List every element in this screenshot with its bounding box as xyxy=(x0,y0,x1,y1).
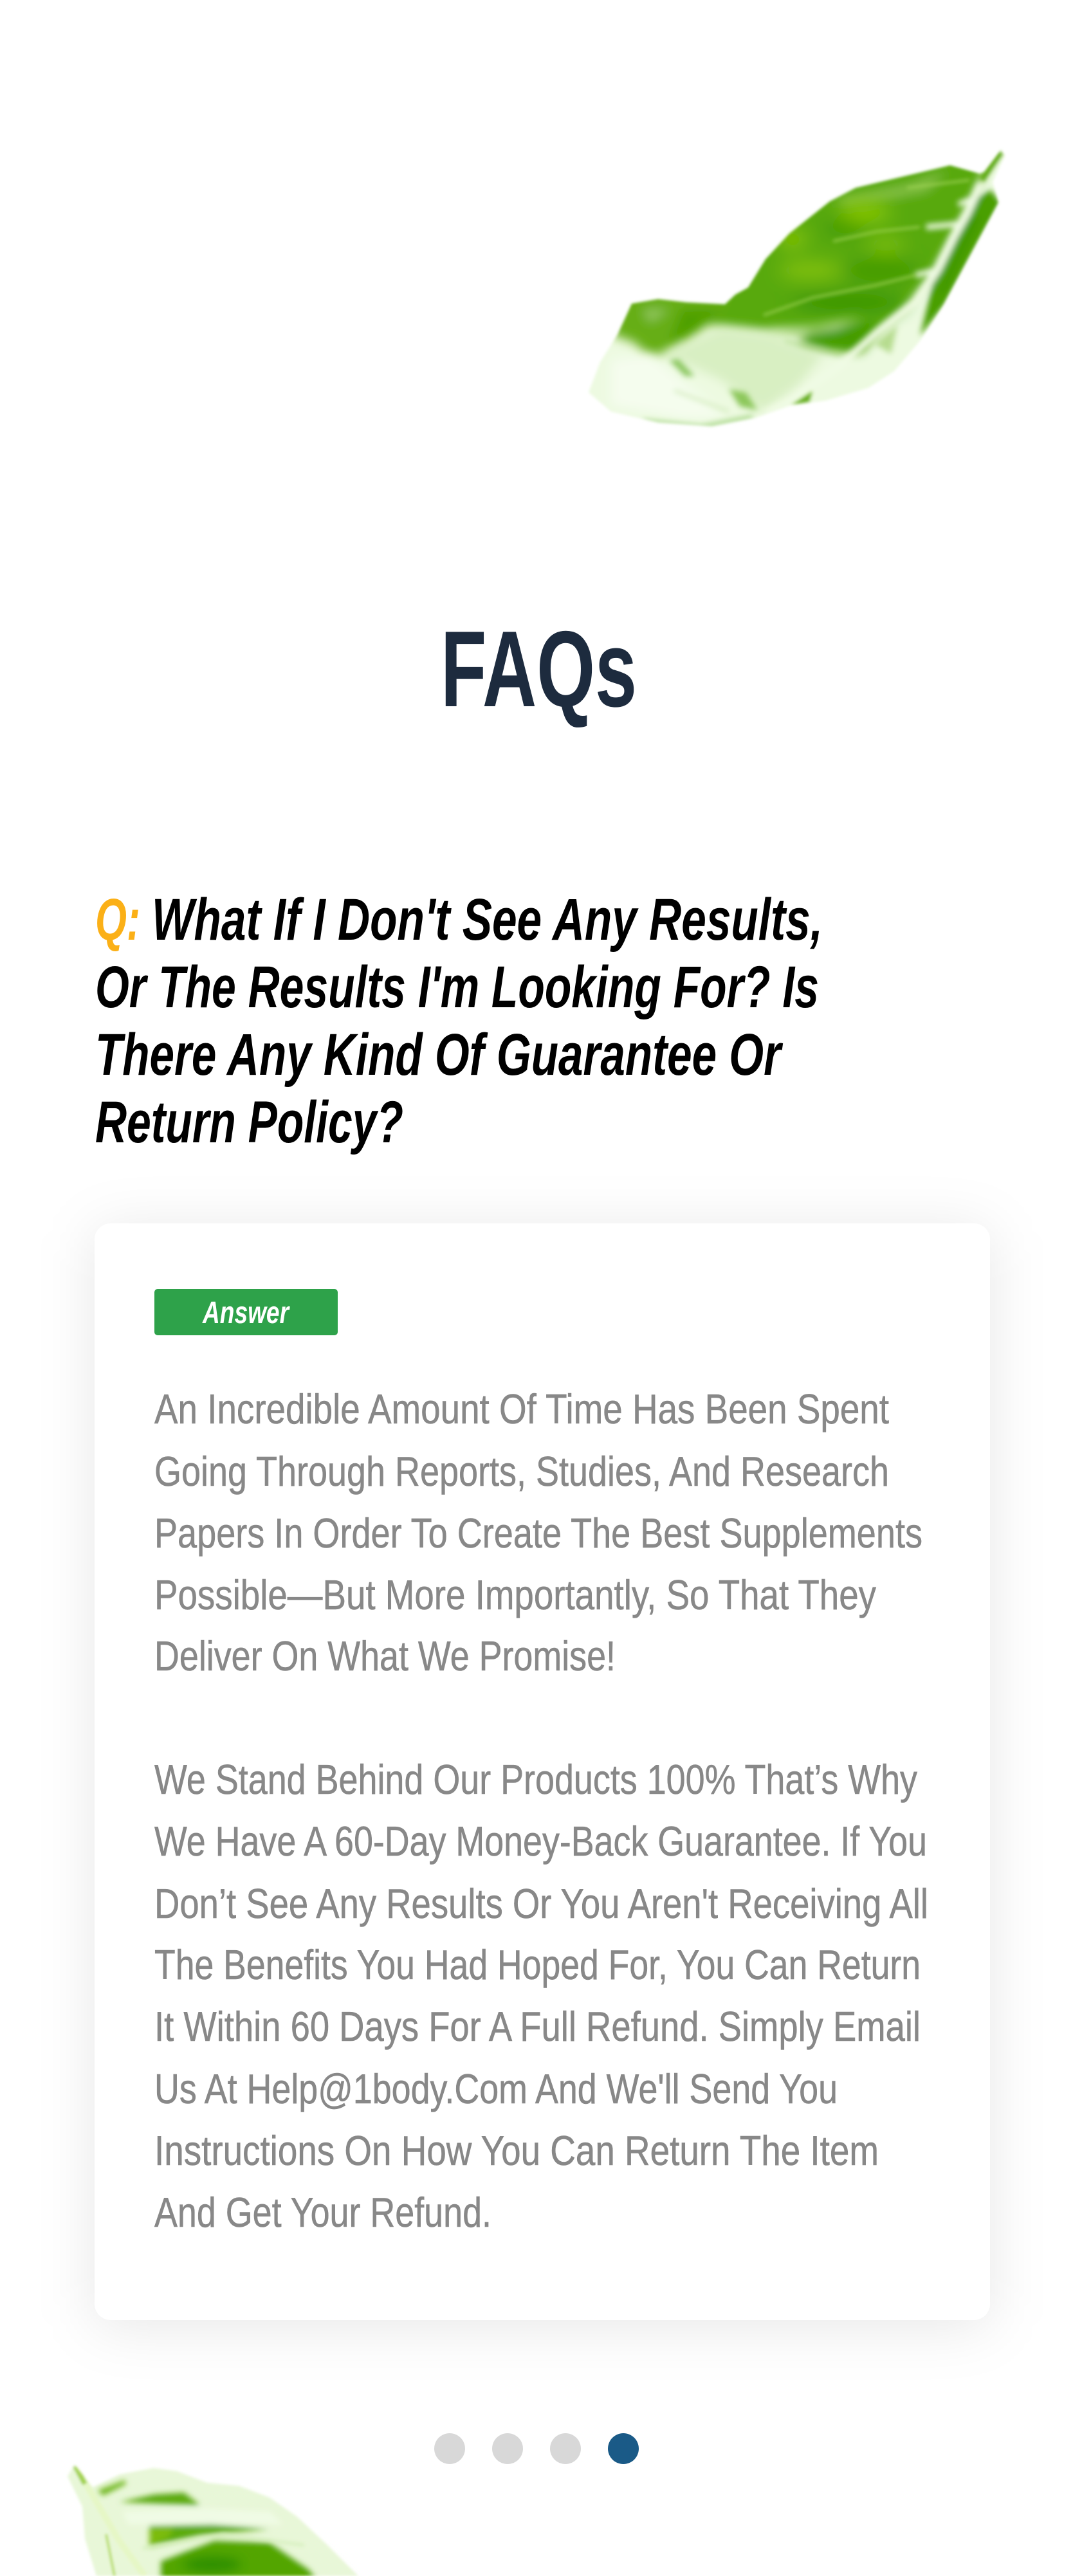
answer paragraph one: Going Through Reports, Studies, And Research xyxy=(154,1448,889,1495)
question heading: There Any Kind Of Guarantee Or xyxy=(95,1022,783,1088)
question heading: What If I Don't See Any Results, xyxy=(152,887,823,953)
answer paragraph two: Us At Help@1body.Com And We'll Send You xyxy=(154,2065,838,2112)
answer paragraph two: Instructions On How You Can Return The Item xyxy=(154,2127,879,2174)
pagination dots xyxy=(434,2433,639,2464)
answer paragraph one: An Incredible Amount Of Time Has Been Spent xyxy=(154,1385,889,1432)
answer paragraph one: Possible—But More Importantly, So That They xyxy=(154,1571,876,1618)
answer paragraph one: Deliver On What We Promise! xyxy=(154,1632,616,1679)
panel: answer card xyxy=(95,1223,990,2326)
leaf right strip xyxy=(920,190,1001,336)
answer paragraph two: We Stand Behind Our Products 100% That’s Why xyxy=(154,1756,917,1803)
leaf main green body xyxy=(708,142,991,352)
answer badge xyxy=(154,1289,338,1335)
answer paragraph one: Papers In Order To Create The Best Supplements xyxy=(154,1510,922,1557)
card shadow xyxy=(95,1230,990,2326)
answer paragraph two xyxy=(154,1756,928,2236)
icon: green basil leaf top right xyxy=(579,142,1010,431)
answer paragraph two: Don’t See Any Results Or You Aren't Receiving All xyxy=(154,1880,928,1927)
answer paragraph one xyxy=(154,1385,922,1679)
question heading: Or The Results I'm Looking For? Is xyxy=(95,955,819,1020)
question heading: Q: xyxy=(95,887,140,953)
leaf side branches xyxy=(915,197,976,275)
leaf midrib xyxy=(766,183,981,414)
answer paragraph two: It Within 60 Days For A Full Refund. Simply Email xyxy=(154,2003,921,2050)
question heading: Return Policy? xyxy=(95,1090,403,1155)
answer badge: Answer xyxy=(202,1296,290,1330)
icon: green basil leaf bottom left xyxy=(61,2460,367,2576)
answer paragraph two: And Get Your Refund. xyxy=(154,2189,491,2236)
title: FAQs xyxy=(441,608,637,729)
answer paragraph two: We Have A 60-Day Money-Back Guarantee. If You xyxy=(154,1818,927,1865)
question heading xyxy=(95,887,823,1155)
answer paragraph two: The Benefits You Had Hoped For, You Can Return xyxy=(154,1941,921,1988)
